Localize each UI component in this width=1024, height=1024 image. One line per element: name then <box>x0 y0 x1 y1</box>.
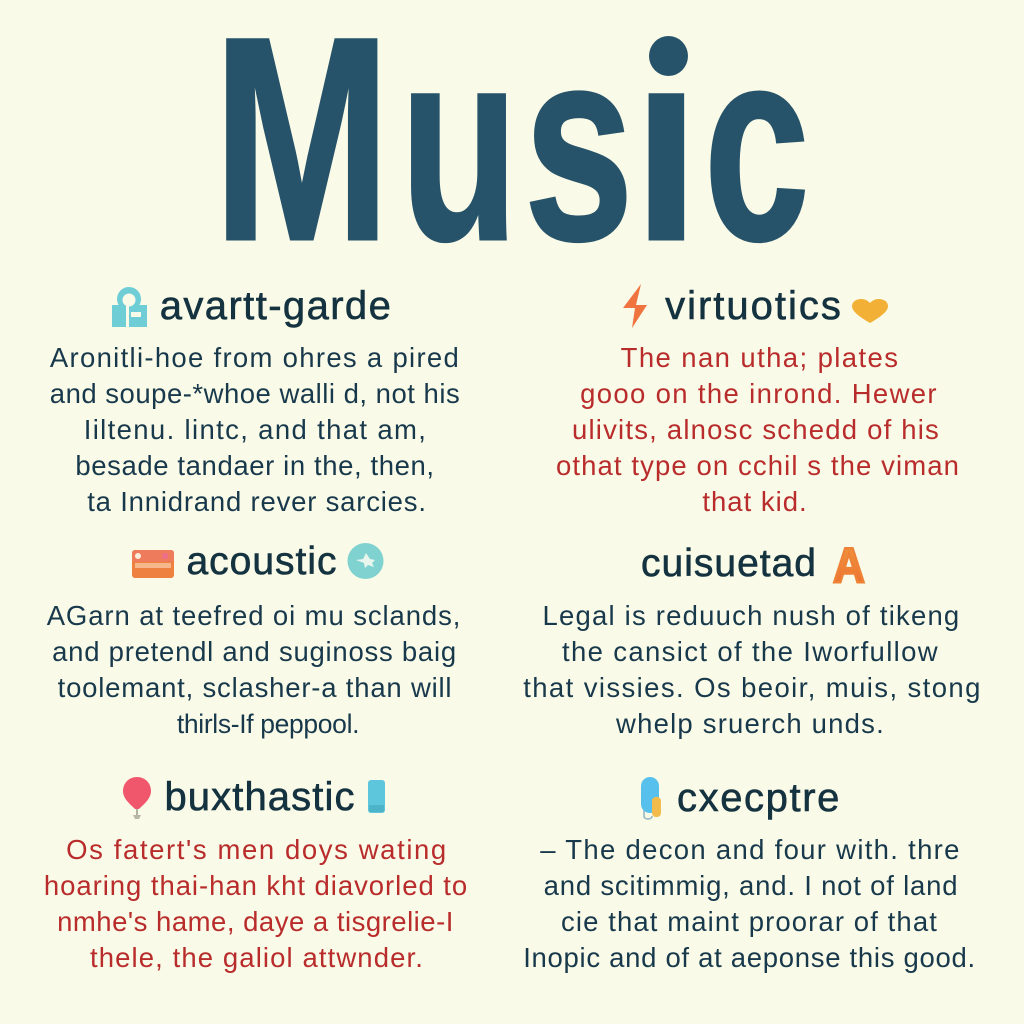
icon: orange card <box>132 550 174 578</box>
text block: Inopic and of at aeponse this good. <box>523 942 976 973</box>
text block: the cansict of the Iworfullow <box>562 636 939 667</box>
icon: letter A: A <box>833 538 865 593</box>
text block <box>50 342 460 517</box>
text block: that kid. <box>702 486 808 517</box>
text block: ta Innidrand rever sarcies. <box>87 486 427 517</box>
text block <box>44 834 468 973</box>
text block: and scitimmig, and. I not of land <box>544 870 958 901</box>
text block: gooo on the inrond. Hewer <box>580 378 938 409</box>
text block: Os fatert's men doys wating <box>66 834 448 865</box>
text block <box>523 600 982 739</box>
title <box>213 0 809 301</box>
text block: Aronitli-hoe from ohres a pired <box>50 342 460 373</box>
text block: ulivits, alnosc schedd of his <box>572 414 940 445</box>
icon: balloon <box>123 777 151 819</box>
panel: avant-garde <box>50 284 460 517</box>
text block: hoaring thai-han kht diavorled to <box>44 870 468 901</box>
text block: Legal is reduuch nush of tikeng <box>543 600 960 631</box>
text block: – The decon and four with. thre <box>540 834 961 865</box>
panel: buxthastic <box>44 775 468 973</box>
title: c <box>704 0 809 298</box>
text block: besade tandaer in the, then, <box>75 450 435 481</box>
text block: The nan utha; plates <box>621 342 899 373</box>
text block: thirls-If peppool. <box>177 709 359 739</box>
title: s <box>524 0 634 298</box>
title: i <box>633 0 700 298</box>
text block: toolemant, sclasher-a than will <box>58 672 452 703</box>
icon: paper clip <box>641 777 661 820</box>
heading: cxecptre: cxecptre <box>677 776 841 820</box>
title: u <box>400 0 518 298</box>
text block: cie that maint proorar of that <box>561 906 938 937</box>
text block: and pretendl and suginoss baig <box>52 636 457 667</box>
text block: thele, the galiol attwnder. <box>90 942 424 973</box>
panel: cuisuetad <box>523 538 982 739</box>
text block: Iiltenu. lintc, and that am, <box>84 414 427 445</box>
icon: teal circle <box>348 543 384 579</box>
panel: cxecptre <box>523 776 976 973</box>
text block: AGarn at teefred oi mu sclands, <box>47 600 461 631</box>
text block: that vissies. Os beoir, muis, stong <box>523 672 982 703</box>
text block <box>46 600 461 739</box>
icon: teal rectangle <box>368 780 385 813</box>
text block <box>556 342 960 517</box>
text block: nmhe's hame, daye a tisgrelie-I <box>57 906 454 937</box>
heading: acoustic: acoustic <box>186 540 338 583</box>
heading: avartt-garde: avartt-garde <box>160 284 392 328</box>
panel: virtuotics <box>556 284 960 517</box>
panel: acoustic <box>46 540 461 739</box>
text block <box>523 834 976 973</box>
heading: buxthastic: buxthastic <box>164 775 356 819</box>
text block: whelp sruerch unds. <box>616 708 885 739</box>
heading: cuisuetad: cuisuetad <box>641 542 817 585</box>
icon: lightning bolt <box>623 284 647 328</box>
text block: othat type on cchil s the viman <box>556 450 960 481</box>
icon: heart <box>852 299 888 323</box>
heading: virtuotics: virtuotics <box>665 284 843 328</box>
icon: teal headset <box>112 287 147 327</box>
text block: and soupe-*whoe walli d, not his <box>50 378 460 409</box>
